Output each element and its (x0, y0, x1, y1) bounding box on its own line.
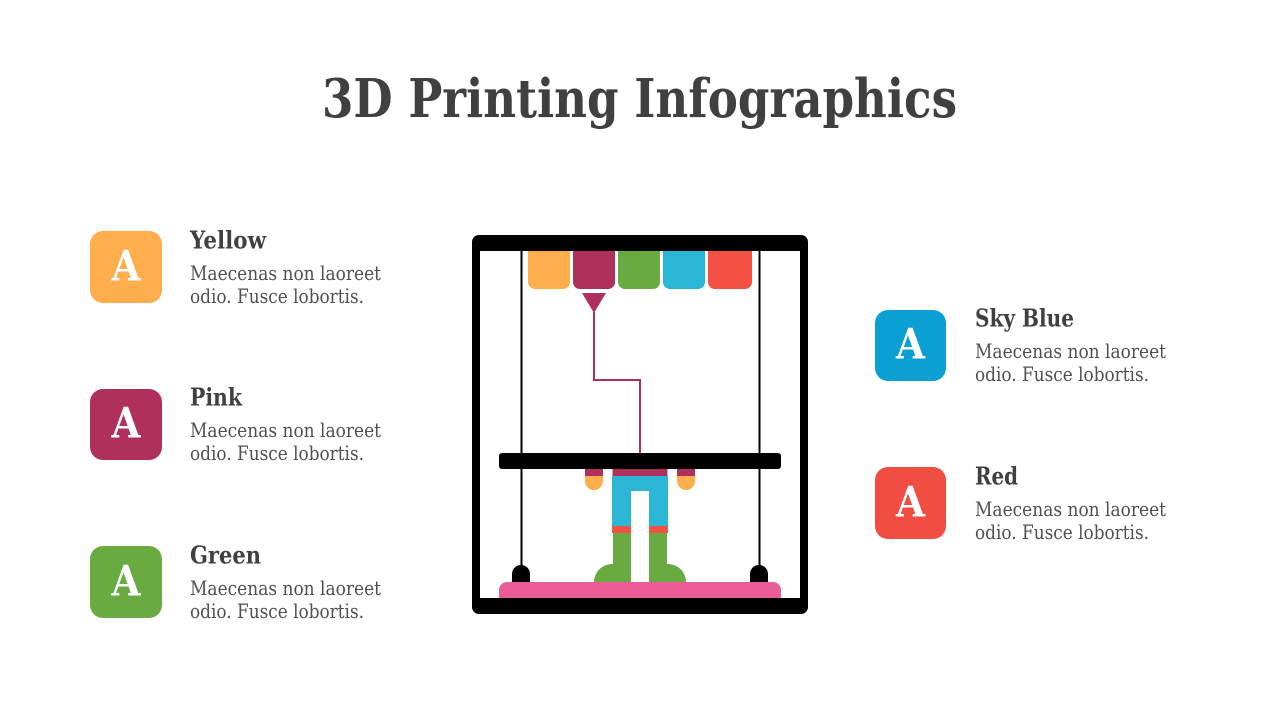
item: Sky Blue (875, 304, 1166, 386)
heading: Sky Blue: Sky Blue (975, 304, 1074, 332)
filament line (594, 312, 640, 453)
text: Sky Blue description (975, 339, 1166, 386)
text: Yellow description: Maecenas non laoreet (190, 261, 381, 285)
item: Yellow (90, 226, 381, 308)
icon: Sky Blue letter badge (875, 310, 946, 381)
item: Green (90, 540, 381, 623)
printer frame (472, 235, 808, 614)
heading: Red: Red (975, 462, 1018, 490)
icon: Red letter badge (875, 467, 946, 539)
trousers (612, 476, 668, 526)
printed figure (585, 469, 695, 582)
text: Pink description: odio. Fusce lobortis. (190, 441, 364, 465)
icon: Green letter badge (90, 546, 162, 618)
item: Pink (90, 382, 381, 465)
item: Red (875, 462, 1166, 544)
torso (612, 469, 668, 476)
icon: Sky Blue letter badge: A (895, 320, 926, 368)
icon: Yellow letter badge (90, 231, 162, 303)
heading: Yellow: Yellow (189, 226, 267, 254)
print bed (499, 582, 781, 598)
right boot (649, 533, 686, 582)
text: Red description (975, 497, 1166, 544)
left boot (594, 533, 631, 582)
rail feet (512, 565, 768, 582)
text: Red description: odio. Fusce lobortis. (975, 520, 1149, 544)
illustration: 3D printer (472, 235, 808, 614)
text: Yellow description: odio. Fusce lobortis. (190, 284, 364, 308)
icon: Green letter badge: A (111, 556, 142, 606)
right arm (677, 469, 695, 490)
text: Pink description (190, 418, 381, 465)
text: Red description: Maecenas non laoreet (975, 497, 1166, 521)
text: Green description: odio. Fusce lobortis. (190, 599, 364, 623)
text: Pink description: Maecenas non laoreet (190, 418, 381, 442)
socks (612, 526, 668, 533)
icon: Red letter badge: A (895, 478, 926, 526)
heading: Green: Green (190, 540, 261, 570)
filament colour spools (528, 251, 752, 289)
icon: Pink letter badge (90, 389, 162, 460)
text: Green description: Maecenas non laoreet (190, 576, 381, 600)
icon: Pink letter badge: A (111, 398, 142, 448)
title: 3D Printing Infographics (322, 68, 957, 130)
left arm (585, 469, 603, 490)
guide rails (520, 251, 760, 571)
text: Yellow description (190, 261, 381, 308)
text: Sky Blue description: Maecenas non laoreet (975, 339, 1166, 363)
icon: Yellow letter badge: A (111, 242, 142, 290)
print nozzle (582, 293, 606, 313)
text: Green description (190, 576, 381, 623)
print head bar (499, 453, 781, 469)
heading: Pink: Pink (190, 382, 243, 412)
text: Sky Blue description: odio. Fusce lobortis. (975, 362, 1149, 386)
